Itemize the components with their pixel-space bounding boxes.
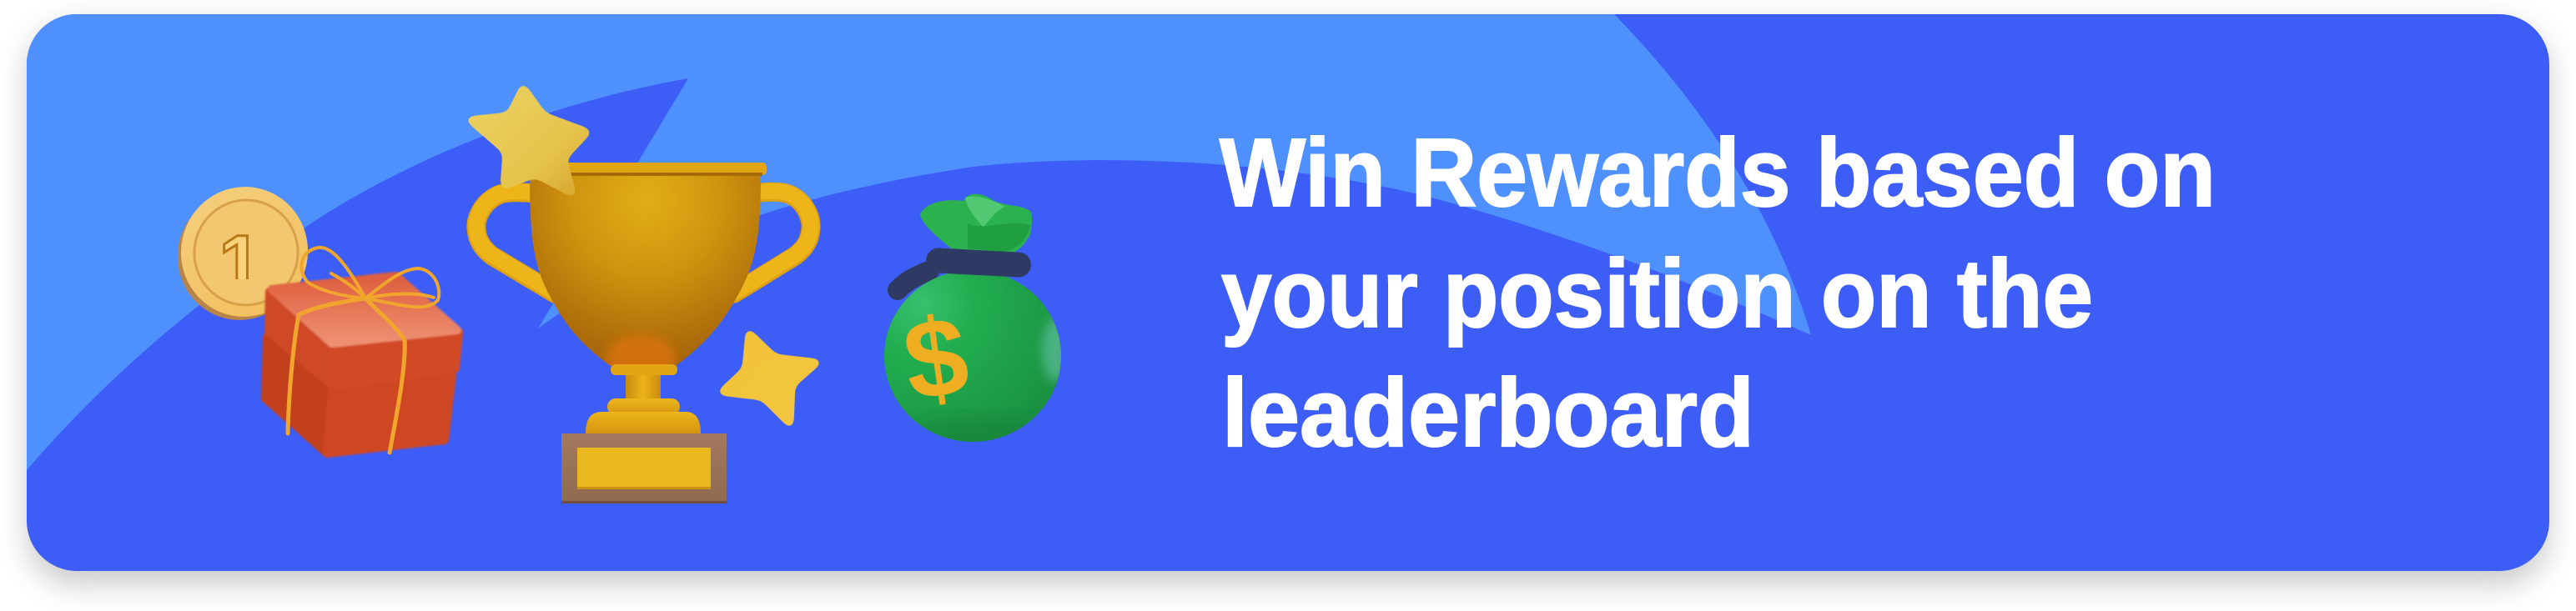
bag neck frill	[920, 194, 1032, 254]
heading line 3: leaderboard	[1222, 358, 1754, 467]
icon: gold coin	[177, 187, 308, 320]
gift box body	[265, 276, 459, 453]
icon: red gift box	[265, 248, 459, 453]
trophy wooden plinth	[561, 433, 727, 503]
icon: green money bag	[884, 194, 1069, 456]
trophy cup	[530, 174, 761, 366]
heading line 2: your position on the	[1221, 239, 2093, 348]
heading line 1: Win Rewards based on	[1220, 118, 2216, 227]
background swoosh shape	[27, 14, 1811, 470]
icon: large star	[468, 86, 589, 195]
heading	[1218, 135, 2211, 448]
trophy neck and base	[626, 375, 661, 398]
icon: small star	[720, 331, 819, 426]
trophy nameplate	[577, 448, 711, 489]
trophy handles	[476, 191, 811, 293]
dollar sign: $	[897, 293, 975, 424]
gift ribbon and bow	[288, 248, 439, 453]
trophy rim	[568, 163, 767, 175]
bag tie tail	[898, 271, 929, 290]
bag tie	[925, 248, 1032, 278]
coin number: 1	[219, 220, 262, 305]
gift box lid	[269, 292, 332, 385]
icon: gold trophy	[476, 163, 811, 503]
bag body	[884, 270, 1061, 442]
